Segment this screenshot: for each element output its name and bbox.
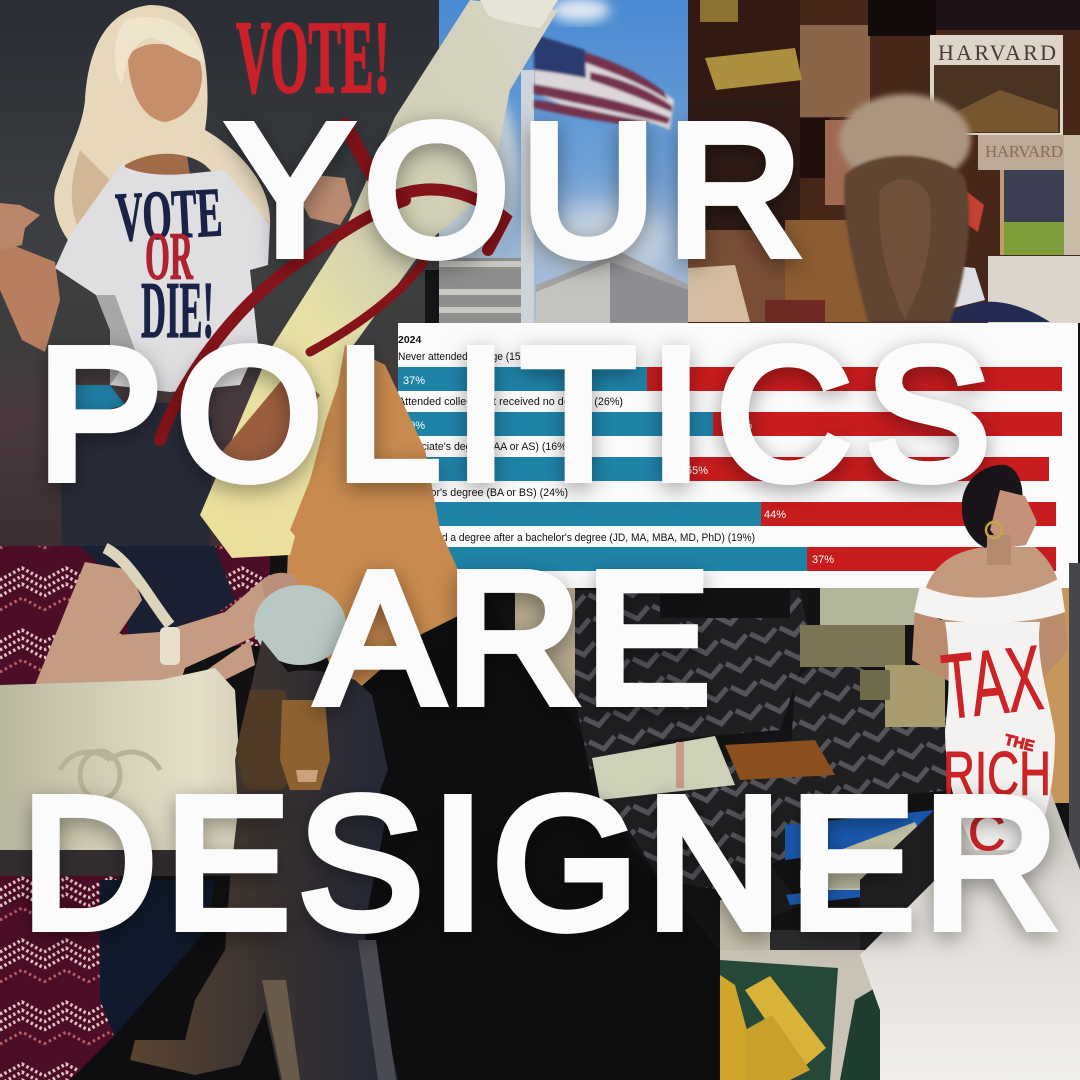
chart row: associate's degree: 55% [686, 465, 708, 477]
chart row: bachelor's degree: Bachelor's degree (BA or BS) (24%) [398, 487, 568, 499]
figure: woman in Tax the Rich gown [860, 465, 1080, 1080]
title: Your Politics Are Designer: YOUR [228, 87, 802, 294]
text: Tax the Rich: THE [1003, 731, 1036, 755]
icon: cash stacks [592, 588, 945, 800]
chart row: associate's degree [398, 441, 1049, 481]
chart row: postgraduate degree [398, 532, 1056, 571]
hand fingers over scroll [290, 345, 440, 590]
icon: American flag [534, 34, 674, 130]
hair and face [962, 465, 1022, 548]
chart row: attended college, no degree [398, 396, 1062, 436]
title: Your Politics Are Designer: DESIGNER [22, 760, 1058, 967]
panel: flag and Supreme Court sky [420, 0, 689, 323]
chart row: associate's degree: Associate's degree (AA or AS) (16%) [398, 441, 570, 453]
title: Your Politics Are Designer: POLITICS [38, 311, 990, 518]
chart row: bachelor's degree: 44% [764, 509, 786, 521]
title: Your Politics Are Designer: ARE [318, 535, 710, 742]
text: Tax the Rich: C [968, 804, 1006, 862]
figure: Paris Hilton in slogan tee [0, 5, 352, 546]
panel: Harvard corkboard [688, 0, 1080, 323]
icon: gold bars in green box [720, 950, 880, 1080]
chart row: attended college, no degree: 49% [403, 420, 425, 432]
clipping: Harvard newspaper [930, 35, 1063, 135]
figure: bronze wolf statue [130, 640, 398, 1080]
clipping: Harvard photo card: HARVARD [985, 142, 1063, 161]
figure: girl with ponytail [839, 94, 1050, 322]
tulle skirt [860, 790, 1080, 1080]
chart row: postgraduate degree: 37% [812, 554, 834, 566]
title: Your Politics Are Designer [22, 87, 1058, 967]
clipping: Harvard photo card [978, 135, 1068, 255]
figure: rolled diploma with ribbon [160, 0, 558, 590]
figure: woman with Chanel bag [0, 546, 346, 1036]
building: Supreme Court frieze [439, 252, 689, 323]
chart year label: 2024 [398, 334, 422, 346]
panel: education vote share bar chart [398, 323, 1078, 588]
figure: Paris Hilton in slogan tee: DIE! [141, 267, 214, 355]
chart row: postgraduate degree: Completed a degree after a bachelor's degree (JD, MA, MBA, MD, PhD) (19%) [398, 532, 755, 544]
chart row: never attended college: Never attended college (15%) [398, 351, 533, 363]
panel: Paris Hilton vote poster: VOTE! [236, 0, 390, 115]
panel: Goyard red pattern [0, 546, 270, 1080]
chart row: attended college, no degree: 50% [730, 420, 752, 432]
chart row: never attended college: 37% [403, 375, 425, 387]
text: VOTE OR DIE! tee: VOTE [114, 174, 224, 257]
figure: black sleeve [70, 600, 720, 1080]
figure: hand holding scroll [286, 345, 470, 690]
text: VOTE OR DIE! tee [114, 189, 222, 339]
panel: Goyard bag filled with cash [505, 588, 1070, 968]
ribbon [160, 125, 505, 440]
clipping: Harvard newspaper: HARVARD [938, 40, 1056, 65]
scroll [200, 0, 558, 558]
right edge strip [1069, 563, 1080, 1080]
chart row: bachelor's degree [398, 487, 1056, 526]
text: VOTE OR DIE! tee: OR [145, 218, 193, 294]
text: Tax the Rich [937, 627, 1051, 862]
icon: quilted Chanel bag [0, 548, 245, 852]
chart row: attended college, no degree: Attended college but received no degree (26%) [398, 396, 623, 408]
chart row: never attended college [398, 351, 1062, 391]
panel: Paris Hilton vote poster [0, 0, 439, 546]
